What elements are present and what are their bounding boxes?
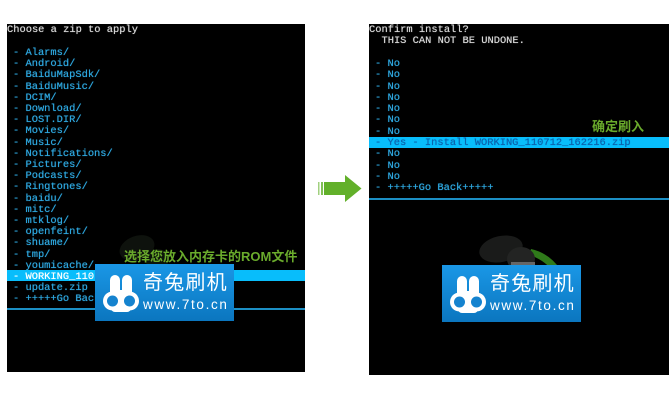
rabbit icon [103,275,139,312]
logo name: 奇兔刷机 [143,272,228,294]
logo badge, right [442,265,581,322]
logo badge, left [95,264,234,321]
folder list: - Alarms/ - Android/ - BaiduMapSdk/ - BaiduMusic/ - DCIM/ - Download/ - LOST.DIR/ - Movies/ - Music/ - Notifications/ - Pictures/ - Podcasts/ - Ringtones/ - baidu/ - mitc/ - mtklog/ - openfeint/ - shuame/ - tmp/ - youmicache/ - WORKING_110 - update.zip - +++++Go Back [13,47,113,305]
option list: - No - No - No - No - No - No - No - Yes - Install WORKING_110712_162216.zip - No - No - No - +++++Go Back+++++ [375,58,631,194]
android hat silhouette, left [120,235,169,264]
logo url: www.7to.cn [143,297,229,312]
panel: right phone screen, confirm install [369,24,669,375]
panel: left phone screen, choose zip [7,24,305,372]
selected row highlight [7,270,305,281]
label: confirm flash: 确定刷入 [592,119,644,134]
yes row highlight [369,137,669,148]
confirm header: Confirm install? THIS CAN NOT BE UNDONE. [369,24,525,47]
divider line [369,198,669,200]
logo name: 奇兔刷机 [490,273,575,295]
divider line [7,308,305,310]
label: select ROM: 选择您放入内存卡的ROM文件 [124,249,297,264]
logo url: www.7to.cn [490,298,576,313]
header text: Choose a zip to apply [7,24,138,36]
arrow [318,175,362,202]
rabbit icon [450,276,486,313]
android mascot with hat silhouette [479,236,557,265]
